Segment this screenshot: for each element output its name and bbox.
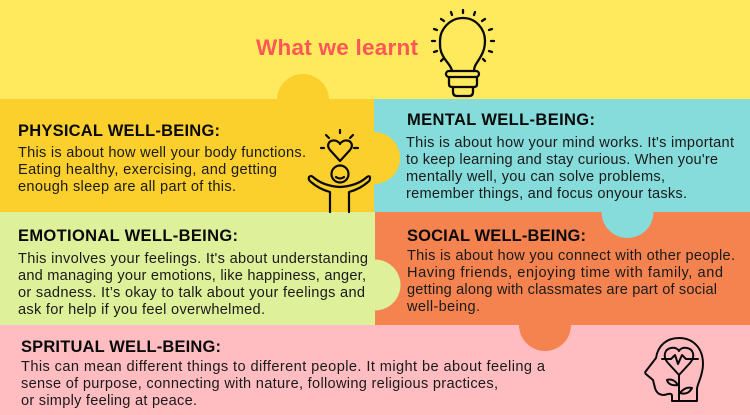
emotional text: ask for help if you feel overwhelmed. (18, 302, 265, 318)
social text (406, 248, 735, 315)
spiritual text: or simply feeling at peace. (21, 393, 197, 409)
panel: emotional background (0, 212, 400, 325)
physical text (18, 145, 306, 195)
icon: person with heart (309, 130, 370, 212)
mental text (406, 135, 734, 202)
emotional text: and managing your emotions, like happiness, anger, (18, 268, 366, 284)
mental text: to keep learning and stay curious. When you're (406, 152, 718, 168)
icon: head with heart flower (645, 338, 703, 401)
panel: mental background (374, 99, 750, 212)
emotional text: This involves your feelings. It's about understanding (18, 251, 368, 267)
mental text: remember things, and focus onyour tasks. (406, 186, 687, 202)
mental text: mentally well, you can solve problems, (406, 169, 665, 185)
social text: well-being. (406, 299, 480, 315)
mental heading: MENTAL WELL-BEING: (407, 111, 595, 129)
spiritual text: sense of purpose, connecting with nature, following religious practices, (21, 376, 498, 392)
physical text: enough sleep are all part of this. (18, 179, 236, 195)
emotional text (18, 251, 368, 318)
social text: Having friends, enjoying time with family, and (407, 265, 723, 281)
panel: header (0, 0, 750, 99)
icon: light bulb (432, 10, 494, 96)
emotional text: or sadness. It’s okay to talk about your feelings and (18, 285, 365, 301)
emotional heading: EMOTIONAL WELL-BEING: (18, 227, 238, 245)
title: What we learnt (256, 35, 418, 60)
physical heading: PHYSICAL WELL-BEING: (18, 122, 220, 140)
social heading: SOCIAL WELL-BEING: (407, 227, 586, 245)
panel: physical background (0, 74, 400, 212)
spiritual heading: SPRITUAL WELL-BEING: (21, 338, 221, 356)
spiritual text: This can mean different things to different people. It might be about feeling a (21, 359, 546, 375)
mental text: This is about how your mind works. It's important (406, 135, 734, 151)
panel: social background (375, 186, 750, 351)
social text: getting along with classmates are part of social (407, 282, 717, 298)
panel: spiritual background (0, 325, 750, 415)
spiritual text (21, 359, 546, 409)
social text: This is about how you connect with other people. (407, 248, 735, 264)
physical text: Eating healthy, exercising, and getting (18, 162, 277, 178)
physical text: This is about how well your body functions. (18, 145, 306, 161)
